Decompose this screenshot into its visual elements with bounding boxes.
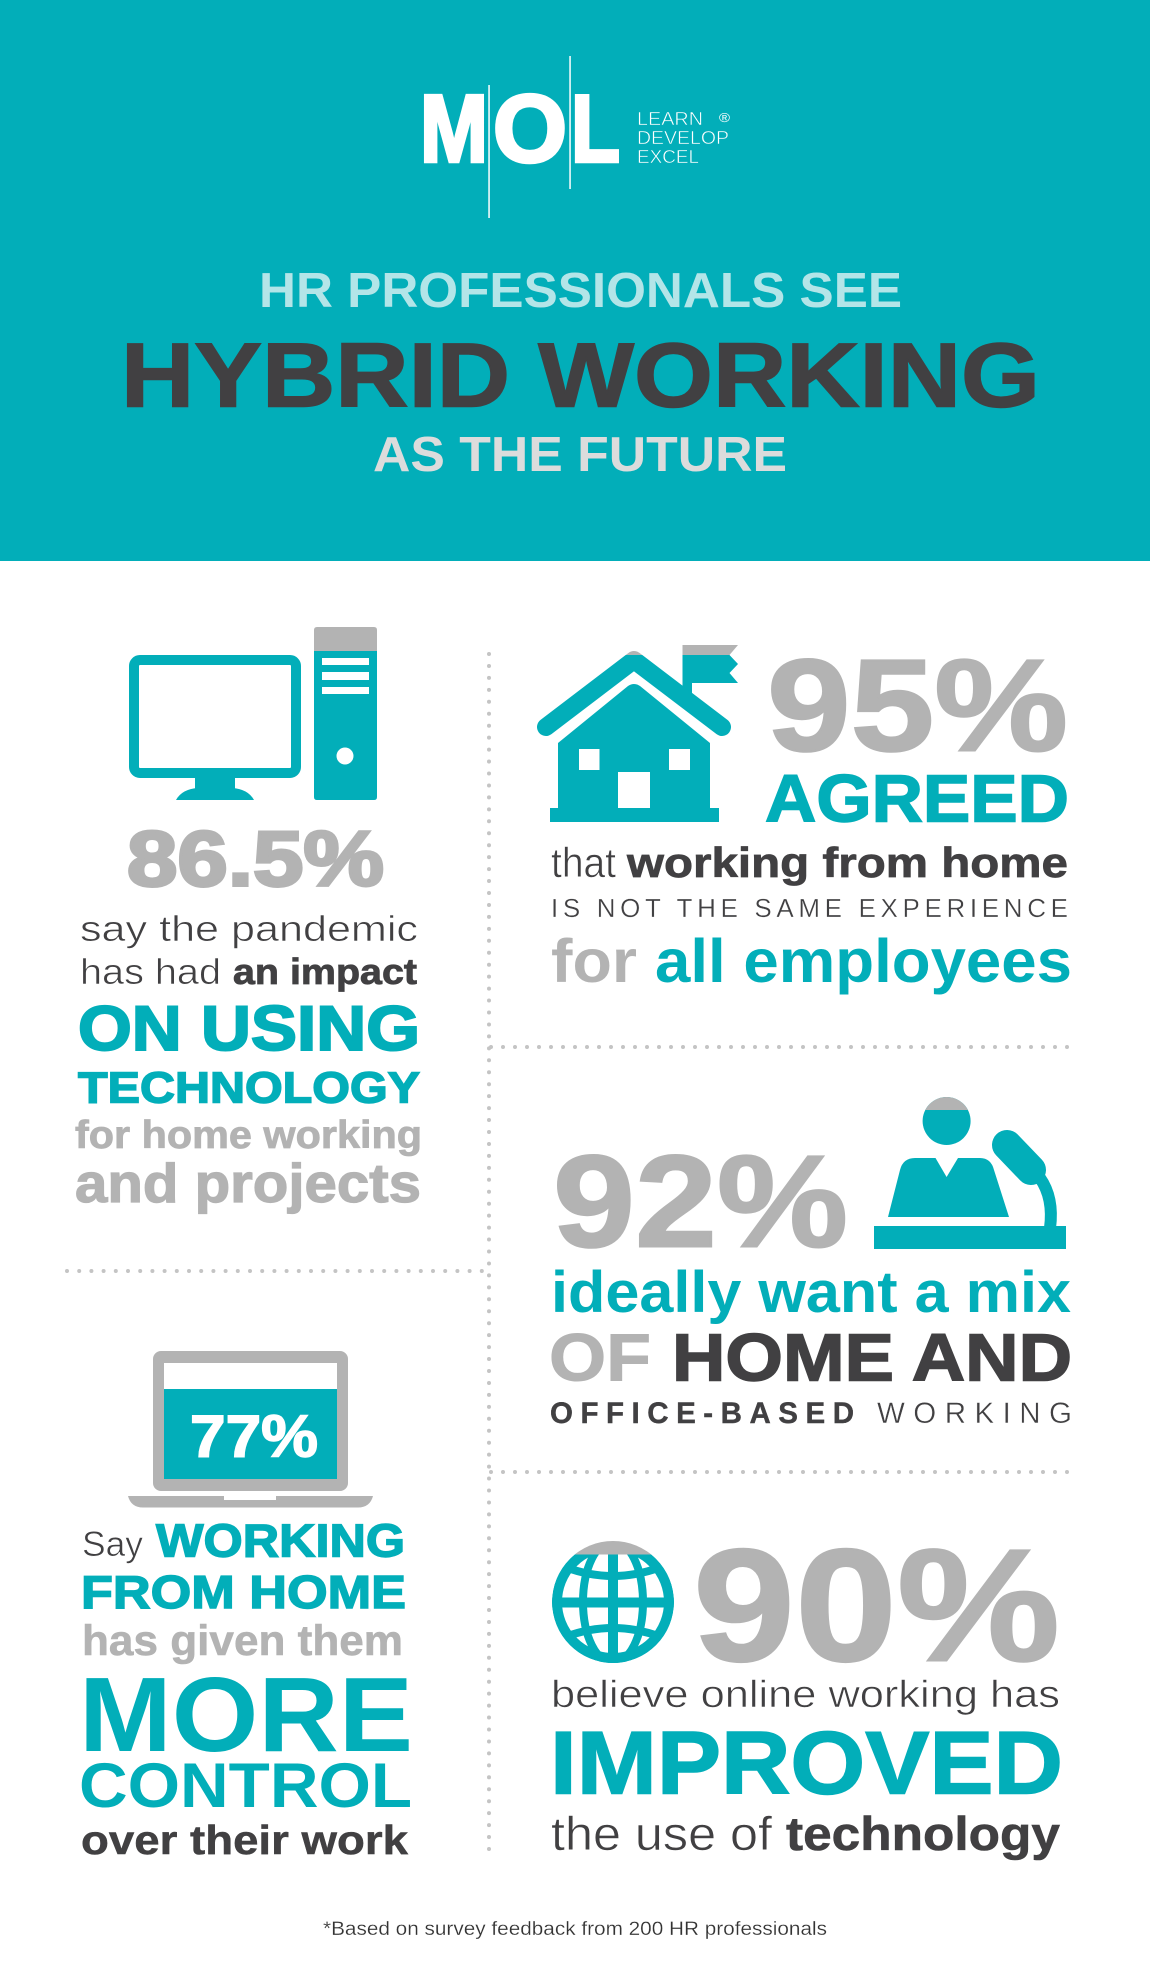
vertical dotted divider <box>487 654 491 1850</box>
text: is not the same experience: IS NOT THE SAME EXPERIENCE <box>551 893 1068 923</box>
text: ON USING: ON USING <box>78 994 420 1064</box>
stat: 92%: 92% <box>553 1128 848 1274</box>
text: for home working: for home working <box>75 1114 422 1157</box>
icon: laptop with 77%: 77% <box>190 1404 318 1470</box>
text: OFFICE-BASED WORKING: WORKING <box>877 1397 1072 1430</box>
footnote: *Based on survey feedback from 200 HR professionals <box>323 1919 827 1940</box>
text: that working from home: working from home <box>626 839 1068 886</box>
logo: MOL: L <box>571 76 620 182</box>
title line 1: HR PROFESSIONALS SEE <box>259 264 902 318</box>
text: OF HOME AND: OF <box>549 1320 651 1396</box>
icon: person at podium <box>874 1097 1066 1249</box>
text: the use of technology <box>551 1807 1060 1860</box>
stat: 95%: 95% <box>767 632 1068 778</box>
panel: 92% mix <box>549 1097 1072 1430</box>
text: TECHNOLOGY: TECHNOLOGY <box>78 1064 420 1112</box>
text: MORE: MORE <box>79 1656 413 1774</box>
icon: desktop computer <box>134 627 377 800</box>
text: IMPROVED: IMPROVED <box>550 1712 1063 1812</box>
text: has had an impact <box>80 951 417 992</box>
text: Say WORKING: Say <box>82 1525 144 1564</box>
logo tagline: DEVELOP <box>637 128 729 148</box>
panel: 77% more control <box>79 1351 413 1863</box>
text: FROM HOME: FROM HOME <box>81 1566 406 1618</box>
horizontal dotted divider right top <box>491 1045 1068 1049</box>
text: has had an impact: has had <box>80 951 221 992</box>
header banner <box>0 0 1150 561</box>
text: the use of technology: the use of <box>551 1807 773 1860</box>
text: CONTROL: CONTROL <box>79 1751 412 1821</box>
logo tagline: EXCEL <box>637 147 699 167</box>
text: the use of technology: technology <box>786 1807 1060 1860</box>
text: OFFICE-BASED WORKING <box>550 1397 1072 1430</box>
logo: MOL: O <box>493 76 567 182</box>
text: over their work: over their work <box>81 1817 408 1863</box>
panel: 90% improved <box>550 1516 1063 1860</box>
text: ideally want a mix: ideally want a mix <box>551 1260 1071 1325</box>
text: for all employees: all employees <box>655 927 1072 995</box>
title line 2: HYBRID WORKING <box>121 326 1040 426</box>
text: believe online working has: believe online working has <box>551 1674 1060 1716</box>
text: AGREED: AGREED <box>765 762 1069 836</box>
panel: 86.5% technology impact <box>75 627 422 1214</box>
logo tagline: LEARN <box>637 109 703 129</box>
horizontal dotted divider right bottom <box>491 1470 1068 1474</box>
text: that working from home: that <box>551 839 616 886</box>
text: OF HOME AND <box>549 1320 1072 1396</box>
logo tagline: ® <box>719 110 730 125</box>
text: OFFICE-BASED WORKING: OFFICE-BASED <box>550 1397 854 1430</box>
logo: MOL: M <box>420 76 488 182</box>
text: has given them: has given them <box>82 1617 403 1665</box>
icon: globe <box>550 1540 676 1664</box>
logo: MOL <box>420 56 620 218</box>
text: has had an impact: an impact <box>233 951 417 992</box>
text: OF HOME AND: HOME AND <box>672 1320 1072 1396</box>
text: and projects: and projects <box>75 1152 421 1214</box>
icon: house with flag <box>546 645 738 822</box>
horizontal dotted divider left <box>67 1269 485 1273</box>
stat: 90%: 90% <box>693 1516 1060 1694</box>
logo tagline <box>637 109 730 167</box>
stat: 86.5%: 86.5% <box>127 814 384 902</box>
text: for all employees: for <box>551 927 637 995</box>
icon: laptop with 77% <box>128 1351 373 1508</box>
text: say the pandemic: say the pandemic <box>80 908 418 949</box>
title line 3: AS THE FUTURE <box>373 428 787 482</box>
text: Say WORKING: WORKING <box>156 1514 405 1566</box>
panel: 95% agreed <box>546 632 1072 995</box>
